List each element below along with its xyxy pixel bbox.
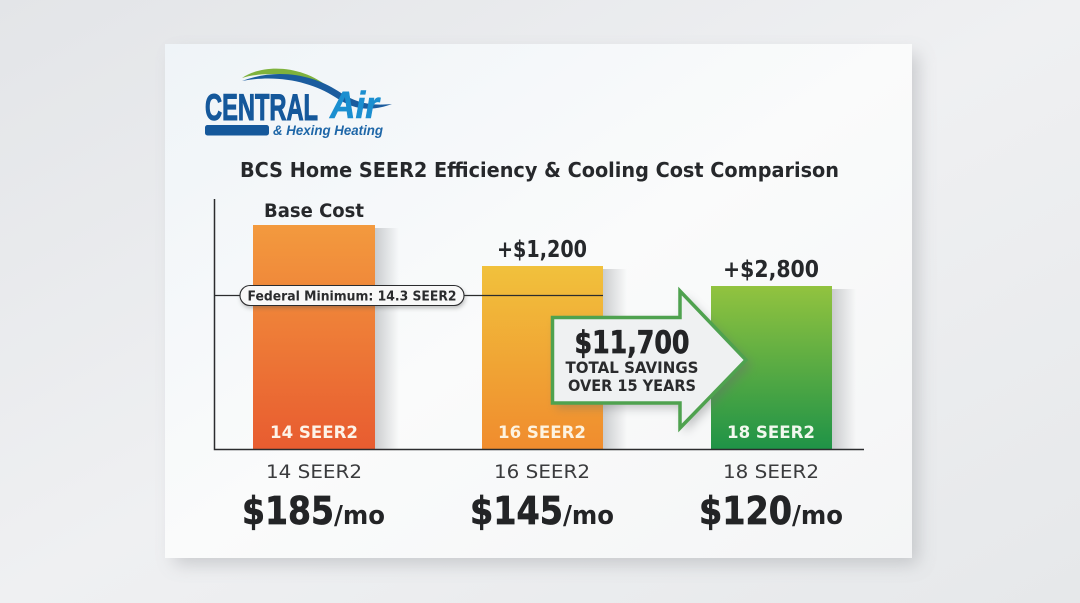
bar: 14 SEER2: 14 SEER2 [270, 423, 358, 443]
column: 18 SEER2 cost: 18 SEER2 [723, 461, 819, 483]
callout figure: $11,700 [574, 325, 690, 361]
logo: CENTRAL wordmark: CENTRAL [205, 87, 318, 128]
column: 16 SEER2 cost: /mo [563, 501, 614, 531]
panel: card [165, 44, 918, 564]
chart axes [214, 199, 864, 450]
label: +$1,200: +$1,200 [497, 237, 587, 263]
federal minimum label [240, 286, 465, 308]
column: 14 SEER2 cost: /mo [334, 501, 385, 531]
bar: 16 SEER2 [482, 266, 627, 449]
logo: Air wordmark: Air [329, 85, 381, 127]
callout text line 1: TOTAL SAVINGS [566, 358, 698, 377]
logo: tagline: & Hexing Heating [273, 123, 384, 138]
bar: 18 SEER2 [711, 286, 856, 449]
column: 14 SEER2 cost: $185 [242, 489, 334, 533]
bar: 14 SEER2 [253, 225, 399, 449]
logo: green swoosh [242, 69, 331, 89]
column: 16 SEER2 cost [470, 461, 614, 533]
bar: 16 SEER2: 16 SEER2 [498, 423, 586, 443]
title: BCS Home SEER2 Efficiency & Cooling Cost Comparison [240, 158, 839, 182]
arrow callout: total savings [552, 291, 752, 433]
column: 14 SEER2 cost [242, 461, 385, 533]
column: 14 SEER2 cost: 14 SEER2 [266, 461, 362, 483]
column: 18 SEER2 cost: $120 [699, 489, 792, 533]
bar chart [214, 199, 864, 450]
logo: blue swoosh [242, 74, 392, 109]
label: +$2,800: +$2,800 [723, 257, 819, 283]
federal minimum line [214, 294, 603, 296]
callout text line 2: OVER 15 YEARS [568, 376, 696, 395]
bar: 18 SEER2: 18 SEER2 [727, 423, 815, 443]
column: 16 SEER2 cost: 16 SEER2 [494, 461, 590, 483]
federal minimum label: Federal Minimum: 14.3 SEER2 [248, 290, 456, 304]
label: base cost: Base Cost [264, 200, 364, 222]
column: 16 SEER2 cost: $145 [470, 489, 563, 533]
column: 18 SEER2 cost [699, 461, 843, 533]
column: 18 SEER2 cost: /mo [792, 501, 843, 531]
logo: blue bar [205, 125, 269, 136]
logo: Central Air and Hexing Heating [205, 69, 392, 138]
